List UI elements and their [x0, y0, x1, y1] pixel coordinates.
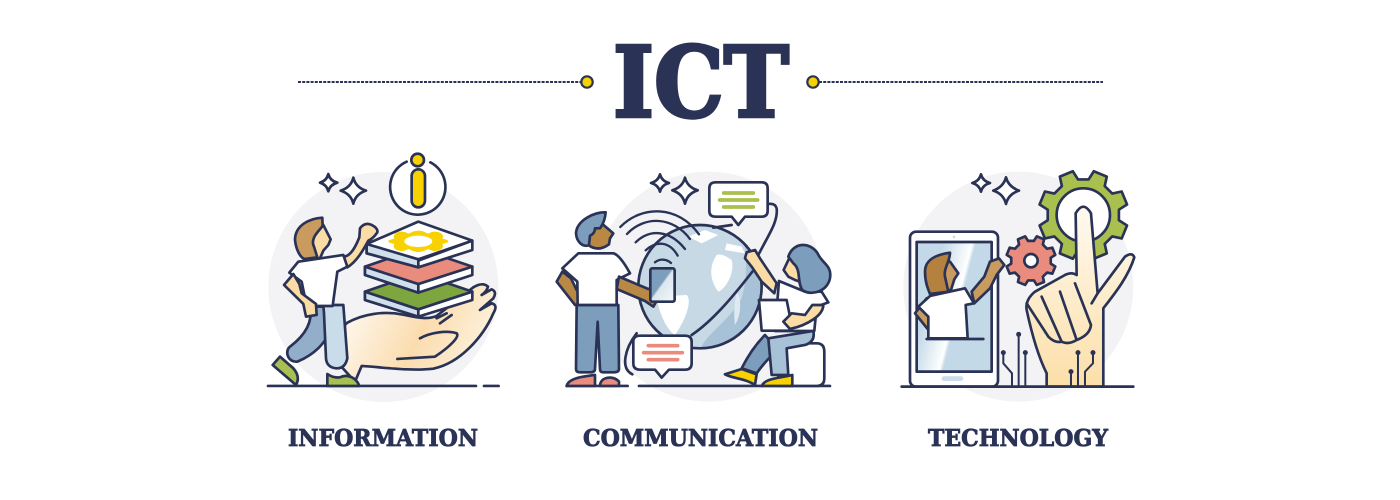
raised arm: [343, 224, 377, 267]
label: technology: TECHNOLOGY: [928, 425, 1109, 452]
data layer: green: [365, 273, 472, 317]
label: information: INFORMATION: [288, 425, 478, 452]
globe: [638, 225, 762, 348]
legs: [576, 305, 619, 372]
right title connector: [807, 76, 1103, 88]
head: [784, 257, 805, 283]
shirt: [775, 281, 828, 331]
panel: technology: [902, 171, 1134, 402]
shirt: [289, 255, 347, 306]
seat: [778, 343, 824, 386]
background circle: [903, 172, 1133, 402]
data layer: salmon: [365, 248, 472, 293]
background circle: [593, 172, 823, 402]
background circle: [268, 172, 498, 402]
head and face: [310, 225, 331, 258]
ground line: [268, 382, 499, 390]
hair: [576, 212, 606, 246]
icon: salmon gear: [1007, 236, 1055, 285]
person: woman with data layers: [273, 218, 377, 386]
hair: [295, 218, 323, 259]
ground line: [567, 382, 830, 390]
raised arm: [745, 250, 777, 293]
laptop: [759, 300, 791, 331]
shirt: [562, 253, 630, 305]
title: ICT: [613, 26, 789, 140]
hand pointing: [1026, 207, 1134, 387]
tablet: [650, 268, 675, 302]
wireless signal arcs: [620, 211, 699, 263]
open hand: [338, 284, 495, 382]
hand fingers detail: [397, 313, 457, 359]
icon: sparkles: [651, 174, 698, 204]
shoes: [725, 369, 757, 385]
front leg: [768, 331, 814, 375]
far arm: [557, 272, 587, 305]
front leg: [323, 305, 347, 368]
icon: sparkles: [320, 174, 366, 204]
back leg: [287, 307, 332, 362]
person: woman with laptop: [725, 245, 830, 386]
icon: green gear: [1040, 171, 1127, 259]
waist arm: [284, 274, 317, 317]
icon: sparkles: [972, 174, 1019, 204]
icon: info symbol: [390, 154, 445, 215]
ground line: [902, 383, 1133, 391]
orbit line: [625, 204, 777, 374]
head: [588, 223, 613, 248]
speech bubble: green: [709, 182, 768, 225]
tablet: [910, 232, 998, 387]
shoes: [273, 357, 298, 385]
data layer: top with gear: [367, 222, 472, 267]
panel: information: [268, 154, 499, 402]
panel: communication: [557, 172, 830, 402]
hair: [788, 245, 830, 293]
tablet arm: [617, 277, 660, 307]
person: man with tablet: [557, 212, 675, 386]
laptop arm: [783, 305, 823, 329]
left title connector: [298, 76, 593, 88]
shoes: [567, 375, 595, 386]
label: communication: COMMUNICATION: [583, 425, 818, 452]
person: woman on tablet screen: [915, 253, 1004, 339]
speech bubble: salmon: [633, 336, 692, 378]
circuit lines: [1001, 332, 1095, 387]
back leg: [742, 335, 778, 373]
